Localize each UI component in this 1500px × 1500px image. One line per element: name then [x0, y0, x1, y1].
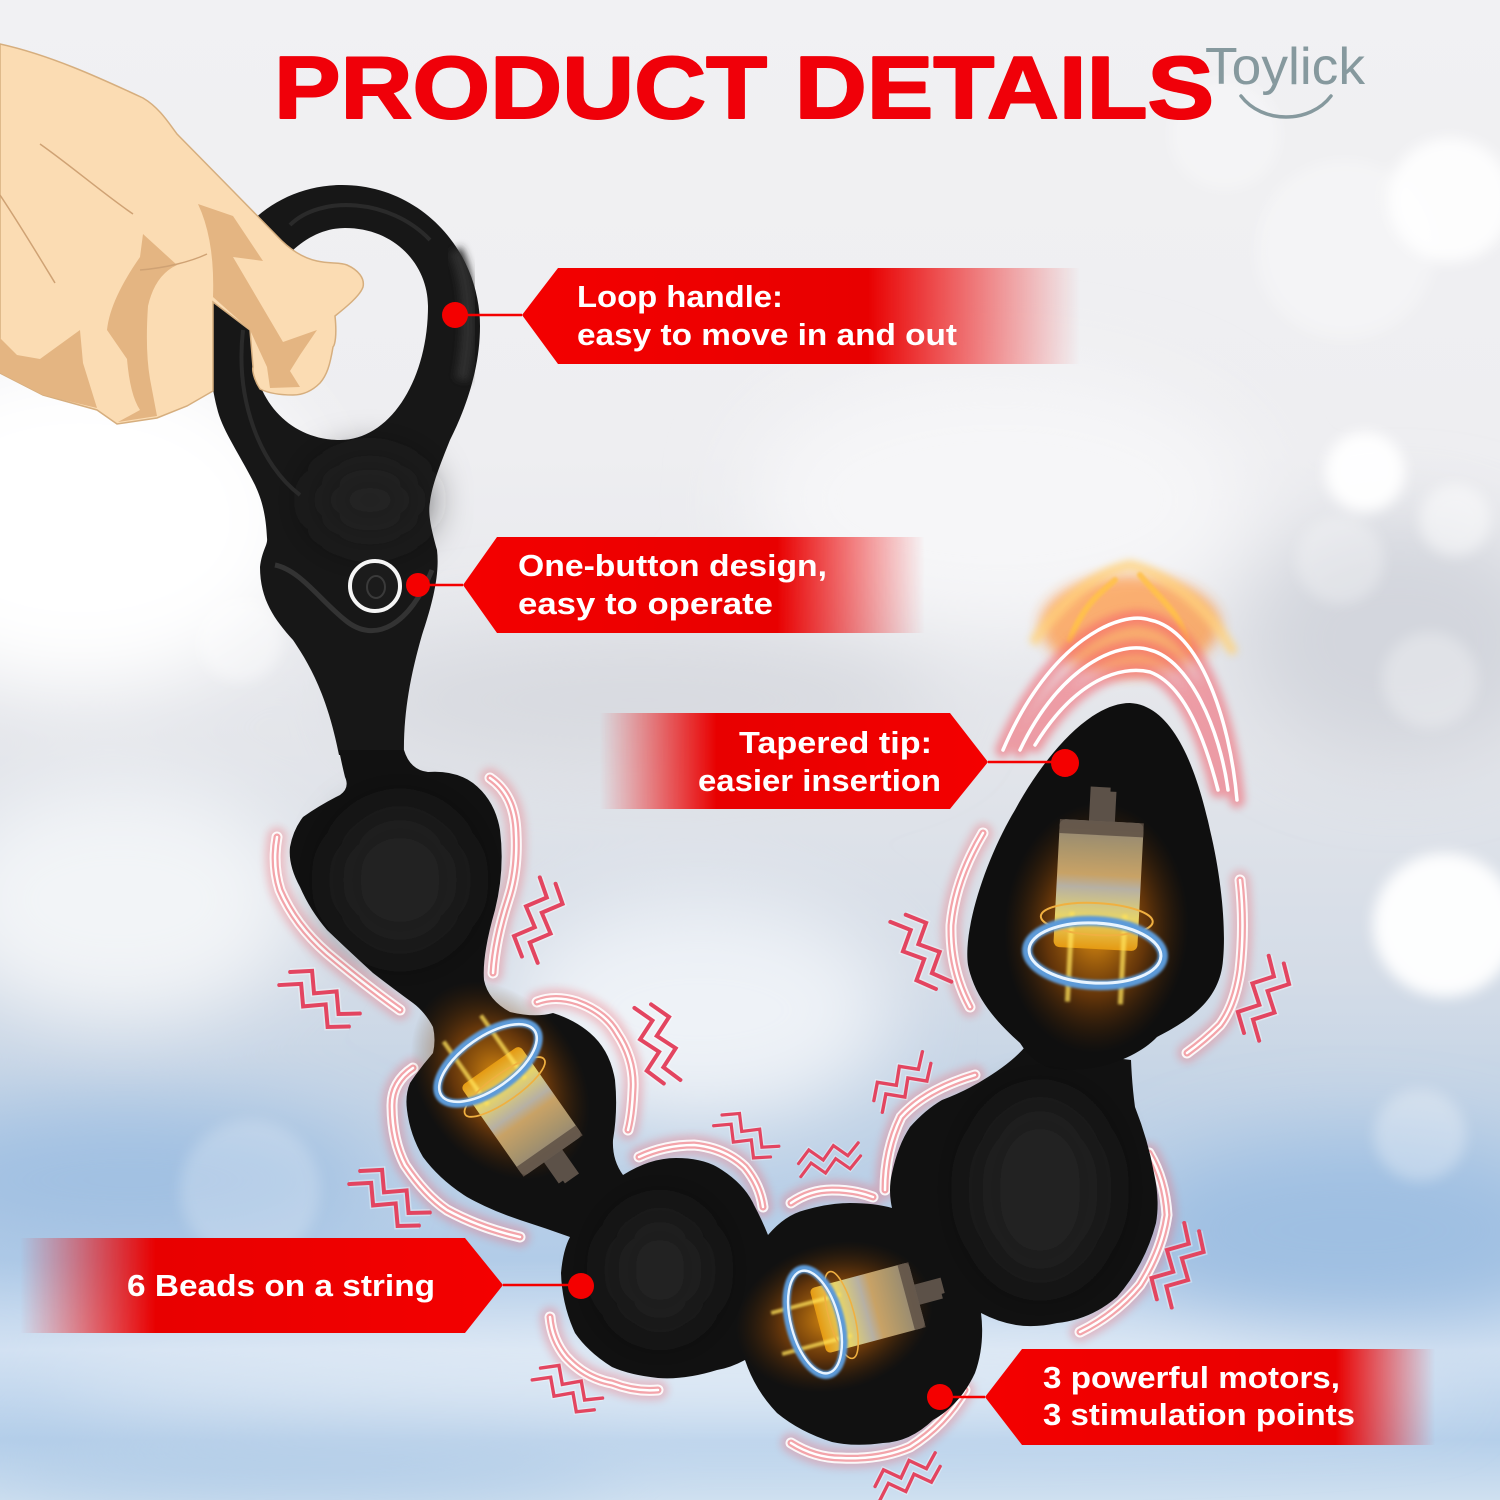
callout: loop handle [442, 268, 1080, 364]
callout: loop handle: Loop handle: [577, 279, 783, 314]
tapered tip [967, 703, 1224, 1070]
callout: tapered tip: Tapered tip: [739, 725, 932, 760]
callout: one-button design: One-button design, [518, 548, 827, 583]
callout: 3 motors [927, 1349, 1435, 1445]
hand gripping the loop [0, 44, 363, 424]
callout: 6 beads: 6 Beads on a string [127, 1268, 435, 1303]
motor: second bead [374, 947, 635, 1225]
callout: tapered tip [600, 713, 1079, 809]
callout: one-button design: easy to operate [518, 586, 773, 621]
logo: Toylick: Toylick [1205, 38, 1366, 96]
callout: tapered tip: easier insertion [698, 763, 941, 798]
product: beaded silhouette with loop handle [208, 185, 1224, 1445]
motor: fourth bead [719, 1217, 962, 1414]
callout: 3 motors: 3 powerful motors, [1043, 1360, 1340, 1395]
motor: tapered tip [998, 782, 1196, 1058]
title: PRODUCT DETAILS [274, 38, 1214, 137]
callout: one-button design [406, 537, 925, 633]
callout: 3 motors: 3 stimulation points [1043, 1397, 1355, 1432]
loop handle and button housing [208, 185, 480, 755]
callout: 6 beads [20, 1238, 594, 1333]
callout: loop handle: easy to move in and out [577, 317, 957, 352]
vibration arcs [275, 778, 1243, 1458]
vibration zigzag icons [279, 877, 1296, 1500]
heat waves above tapered tip [1003, 565, 1237, 800]
bead chain [290, 750, 1158, 1445]
surface highlights [315, 460, 1105, 1330]
button with white ring [350, 561, 400, 611]
